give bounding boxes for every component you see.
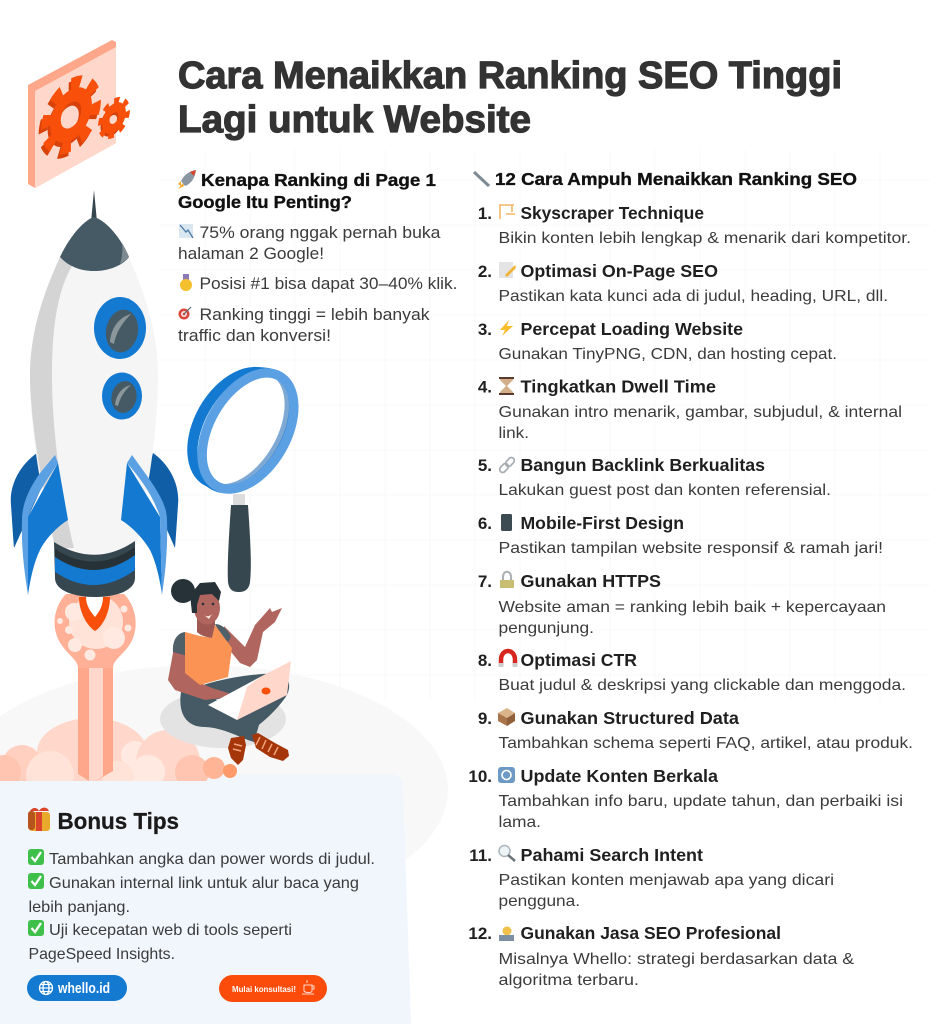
button: mulai konsultasi xyxy=(219,975,327,1002)
list item 11: Pahami Search Intent xyxy=(520,845,703,865)
list item 2: 2. xyxy=(478,262,492,281)
heading: why ranking matters: Google Itu Penting? xyxy=(178,192,352,212)
porthole lower xyxy=(102,372,142,420)
engine collar xyxy=(54,541,135,597)
point 1 xyxy=(178,224,441,263)
point 3: Ranking tinggi = lebih banyak xyxy=(200,306,430,324)
list item 12: Misalnya Whello: strategi berdasarkan data & xyxy=(498,951,854,968)
list item 10 xyxy=(468,766,903,831)
shoes xyxy=(228,736,246,765)
glass ring xyxy=(167,349,316,511)
small gear xyxy=(100,95,128,141)
list item 9: 9. xyxy=(478,709,492,728)
list item 7: 7. xyxy=(478,572,492,591)
nose cone xyxy=(60,217,129,271)
list item 2: Pastikan kata kunci ada di judul, heading, URL, dll. xyxy=(498,288,888,305)
icon: search xyxy=(499,846,515,861)
button: mulai konsultasi: Mulai konsultasi! xyxy=(232,985,296,994)
shirt xyxy=(185,625,232,685)
button: whello.id: whello.id xyxy=(57,981,110,997)
right arm xyxy=(224,608,282,667)
title xyxy=(178,55,842,141)
legs xyxy=(180,689,259,742)
list item 4 xyxy=(478,376,902,442)
icon: memo xyxy=(499,262,516,278)
icon: lightning xyxy=(500,320,513,336)
front fin right xyxy=(121,463,162,595)
list item 5: 5. xyxy=(478,456,492,475)
list item 10: lama. xyxy=(498,814,541,831)
icon: crane xyxy=(499,205,515,219)
list item 2 xyxy=(478,261,888,305)
rocket spike xyxy=(91,190,97,222)
list item 7: Website aman = ranking lebih baik + kepercayaan xyxy=(498,599,886,616)
icon: chart down xyxy=(179,224,193,238)
point 3 xyxy=(178,306,430,345)
exhaust head xyxy=(55,594,136,668)
list item 4: Tingkatkan Dwell Time xyxy=(520,376,716,396)
tip 2: lebih panjang. xyxy=(28,899,130,916)
list item 11 xyxy=(469,845,834,910)
list item 6: Pastikan tampilan website responsif & ramah jari! xyxy=(498,540,883,557)
sleeve left xyxy=(173,632,188,656)
tip 2 xyxy=(28,873,359,916)
panel: bonus tips background xyxy=(0,774,411,1024)
background blob xyxy=(0,665,448,915)
front fin left xyxy=(28,463,68,595)
exhaust stem xyxy=(78,660,113,781)
list item 8: Buat judul & deskripsi yang clickable dan menggoda. xyxy=(498,677,906,694)
point 3: traffic dan konversi! xyxy=(178,327,331,345)
list item 3: 3. xyxy=(478,320,492,339)
tip 1: Tambahkan angka dan power words di judul. xyxy=(49,851,375,868)
illustration: rocket xyxy=(11,190,178,597)
icon: gift xyxy=(28,808,50,831)
icon: lock xyxy=(500,572,514,588)
bonus tips content xyxy=(27,808,375,1002)
head xyxy=(194,592,220,624)
big gear xyxy=(43,71,96,163)
tip 3 xyxy=(28,920,292,963)
left arm xyxy=(168,642,238,700)
point 1: 75% orang nggak pernah buka xyxy=(200,224,441,242)
list item 9: Tambahkan schema seperti FAQ, artikel, atau produk. xyxy=(498,735,913,752)
porthole upper xyxy=(94,297,146,359)
list item 11: 11. xyxy=(469,846,492,865)
list item 6: Mobile-First Design xyxy=(520,513,684,533)
tip 2: Gunakan internal link untuk alur baca yang xyxy=(49,875,359,892)
list item 12: Gunakan Jasa SEO Profesional xyxy=(520,923,781,943)
sleeve right xyxy=(215,624,231,645)
list item 2: Optimasi On-Page SEO xyxy=(520,261,718,281)
list item 3 xyxy=(478,319,837,363)
illustration: woman with laptop xyxy=(160,579,291,765)
heading: bonus tips: Bonus Tips xyxy=(58,808,179,834)
list item 1: Bikin konten lebih lengkap & menarik dari kompetitor. xyxy=(498,230,911,247)
orange flame xyxy=(79,597,110,631)
icon: hourglass xyxy=(499,377,514,395)
list item 10: 10. xyxy=(468,767,492,786)
list item 8: 8. xyxy=(478,651,492,670)
icon: medal xyxy=(180,274,192,291)
list item 8 xyxy=(478,650,906,694)
list item 3: Gunakan TinyPNG, CDN, dan hosting cepat. xyxy=(498,346,837,363)
list item 7: Gunakan HTTPS xyxy=(520,571,661,591)
text block: why ranking matters xyxy=(178,170,458,345)
list item 4: 4. xyxy=(478,378,492,396)
list item 5 xyxy=(478,455,831,499)
illustration: rocket flame xyxy=(0,594,237,799)
list item 4: Gunakan intro menarik, gambar, subjudul, & internal xyxy=(498,404,902,421)
list item 11: Pastikan konten menjawab apa yang dicari xyxy=(498,872,834,889)
list item 3: Percepat Loading Website xyxy=(520,319,743,339)
icon: wrench xyxy=(474,172,489,186)
list item 12: 12. xyxy=(468,924,492,943)
list item 6: 6. xyxy=(478,514,492,533)
icon: phone xyxy=(501,514,512,531)
smoke clouds xyxy=(0,719,237,781)
heading: why ranking matters xyxy=(178,170,436,212)
laptop xyxy=(208,661,291,720)
list item 11: pengguna. xyxy=(498,893,580,910)
neck xyxy=(197,616,215,638)
point 2: Posisi #1 bisa dapat 30–40% klik. xyxy=(200,275,458,293)
tip 3: PageSpeed Insights. xyxy=(28,946,175,963)
icon: rocket xyxy=(178,170,196,189)
list item 1 xyxy=(478,203,911,247)
hair xyxy=(190,582,221,613)
face details xyxy=(202,603,214,619)
tip 3: Uji kecepatan web di tools seperti xyxy=(49,922,292,939)
glass neck xyxy=(233,494,245,512)
list item 7 xyxy=(478,571,886,637)
glass handle xyxy=(228,505,251,592)
list item 9 xyxy=(478,708,913,752)
icon: technologist xyxy=(499,926,514,941)
list item 9: Gunakan Structured Data xyxy=(520,708,739,728)
heading: why ranking matters: Kenapa Ranking di Page 1 xyxy=(201,170,436,190)
button: whello.id xyxy=(27,975,127,1001)
illustration: magnifying glass xyxy=(167,349,316,592)
list item 5: Lakukan guest post dan konten referensial. xyxy=(498,482,831,499)
illustration: gear panel xyxy=(28,40,128,188)
list item 1: Skyscraper Technique xyxy=(520,203,704,223)
list item 5: Bangun Backlink Berkualitas xyxy=(520,455,765,475)
list item 4: link. xyxy=(498,425,529,442)
list heading: 12 Cara Ampuh Menaikkan Ranking SEO xyxy=(495,169,857,189)
list item 6 xyxy=(478,513,883,557)
icon: target xyxy=(178,307,191,320)
list item 12 xyxy=(468,923,854,989)
icon: link xyxy=(498,456,516,474)
ground shadow xyxy=(160,690,286,748)
list item 7: pengunjung. xyxy=(498,620,594,637)
title: Lagi untuk Website xyxy=(178,99,531,141)
list item 1: 1. xyxy=(478,204,492,223)
list item 8: Optimasi CTR xyxy=(520,650,637,670)
list item 10: Tambahkan info baru, update tahun, dan perbaiki isi xyxy=(498,793,903,810)
rocket body xyxy=(30,257,158,560)
title: Cara Menaikkan Ranking SEO Tinggi xyxy=(178,55,842,97)
point 1: halaman 2 Google! xyxy=(178,245,324,263)
back fins xyxy=(11,453,45,548)
list item 10: Update Konten Berkala xyxy=(520,766,718,786)
hair bun xyxy=(171,579,195,603)
icon: magnet xyxy=(499,651,517,667)
icon: package xyxy=(498,708,515,726)
list item 12: algoritma terbaru. xyxy=(498,972,639,989)
icon: refresh xyxy=(498,767,515,783)
